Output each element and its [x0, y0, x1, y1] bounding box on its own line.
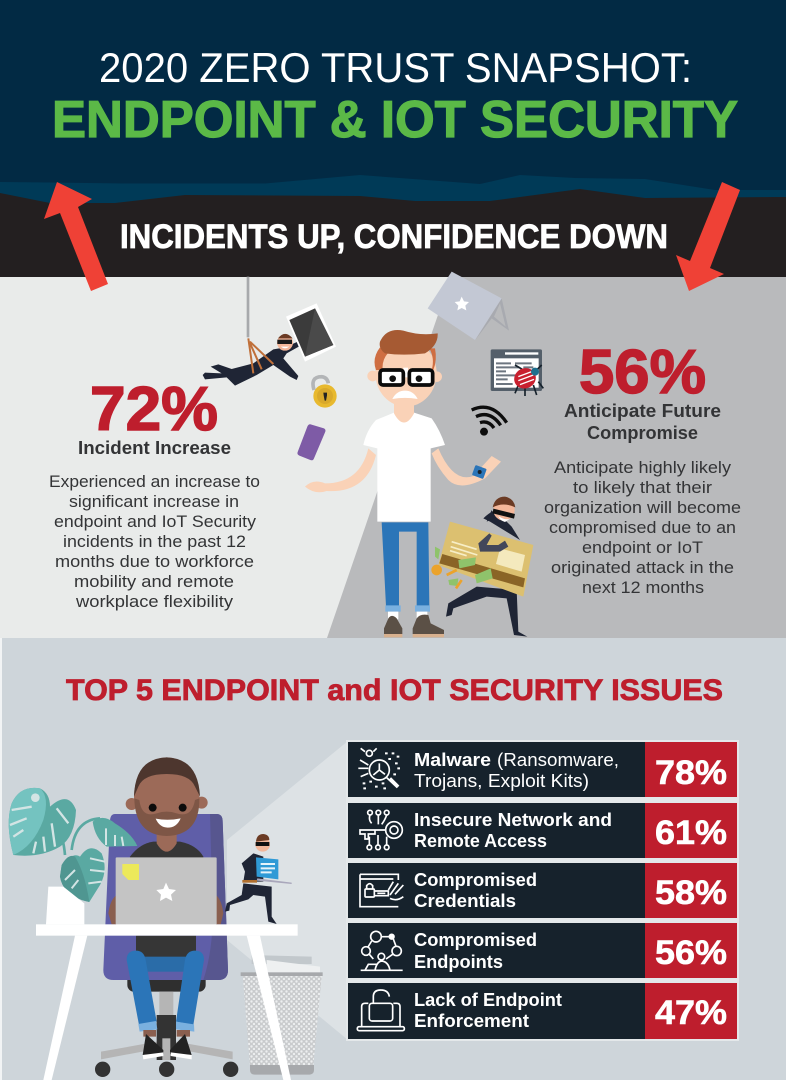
stat label: incident increase: Incident Increase	[78, 437, 231, 458]
heading: top 5 issues: TOP 5 ENDPOINT and IOT SECURITY ISSUES	[66, 674, 723, 707]
text block: compromise description: originated attack in the	[551, 558, 734, 577]
row: compromised endpoints: 56%	[655, 934, 727, 972]
panel: top 5 background	[0, 638, 786, 1080]
arrow: up	[44, 182, 108, 291]
icon: endpoint network	[361, 931, 403, 970]
panel: incident increase statistic	[49, 375, 260, 611]
row: malware	[348, 742, 737, 797]
row: lack of endpoint enforcement: 47%	[655, 994, 727, 1032]
illustration: thief on rope with tablet	[203, 277, 336, 386]
text block: compromise description: endpoint or IoT	[582, 538, 703, 557]
icon: padlock	[313, 377, 337, 408]
table: top 5 issues	[346, 740, 739, 1041]
row: lack of endpoint enforcement: Enforcement	[414, 1010, 529, 1031]
text block: incident description: months due to workforce	[55, 552, 254, 571]
icon: flying laptop	[428, 272, 509, 340]
text block: incident description: incidents in the past 12	[63, 532, 246, 551]
text block: compromise description: organization will become	[544, 498, 741, 517]
text block: incident description: significant increase in	[69, 492, 239, 511]
text block: compromise description: next 12 months	[582, 578, 704, 597]
row: compromised endpoints: Endpoints	[414, 951, 503, 972]
icon: malware magnifier	[358, 748, 400, 788]
illustration: desk	[36, 924, 298, 1080]
illustration: man at desk with laptop	[95, 757, 238, 1077]
icon: laptop with open lock	[357, 990, 404, 1031]
illustration: thief stealing credit card	[431, 497, 533, 637]
row: compromised credentials: Compromised	[414, 869, 537, 890]
stat: 72%: 72%	[90, 375, 218, 444]
text block: incident description: workplace flexibility	[75, 592, 234, 611]
text block: incident description: endpoint and IoT Security	[54, 512, 257, 531]
row: malware: 78%	[655, 754, 727, 792]
title: 2020 ZERO TRUST SNAPSHOT:	[99, 44, 692, 91]
row: insecure network	[348, 803, 737, 858]
row: compromised endpoints	[348, 923, 737, 978]
row: insecure network: 61%	[655, 814, 727, 852]
title	[52, 44, 738, 149]
row: compromised credentials: 58%	[655, 874, 727, 912]
panel: anticipate future compromise statistic	[544, 338, 741, 597]
text block: compromise description: compromised due to an	[549, 518, 736, 537]
row: malware: Trojans, Exploit Kits)	[414, 770, 589, 791]
title: ENDPOINT & IOT SECURITY	[52, 91, 738, 149]
illustration: wastebasket	[241, 955, 323, 1075]
illustration: plant in white vase	[9, 788, 137, 924]
row: insecure network: Remote Access	[414, 830, 547, 851]
text block: incident description	[49, 472, 260, 611]
header background	[0, 0, 786, 280]
icon: key with circuits	[360, 810, 402, 850]
text block: compromise description: to likely that their	[573, 478, 712, 497]
stat: 56%: 56%	[579, 338, 706, 407]
row: lack of endpoint enforcement	[348, 983, 737, 1039]
text block: incident description: mobility and remote	[74, 572, 234, 591]
arrow: down	[676, 182, 740, 291]
text block: compromise description	[544, 458, 741, 597]
illustration: thief stealing laptop on desk	[225, 834, 292, 924]
row: malware: Malware	[414, 749, 491, 770]
text block: incident description: Experienced an increase to	[49, 472, 260, 491]
stat label: anticipate future compromise: Compromise	[587, 422, 698, 443]
text block: compromise description: Anticipate highly likely	[554, 458, 732, 477]
row: insecure network: Insecure Network and	[414, 809, 612, 830]
stat label: anticipate future compromise: Anticipate Future	[564, 400, 721, 421]
row: lack of endpoint enforcement: Lack of Endpoint	[414, 989, 562, 1010]
heading: incidents up, confidence down: INCIDENTS UP, CONFIDENCE DOWN	[120, 218, 668, 256]
row: malware: (Ransomware,	[497, 749, 619, 770]
panel: incidents background	[0, 277, 786, 638]
icon: purple phone	[297, 424, 325, 460]
stat label: anticipate future compromise	[564, 400, 721, 443]
icon: browser with bug	[491, 349, 543, 396]
row: compromised credentials	[348, 863, 737, 918]
row: compromised endpoints: Compromised	[414, 929, 537, 950]
icon: credentials login	[360, 874, 403, 907]
icon: wifi	[472, 407, 507, 436]
row: compromised credentials: Credentials	[414, 890, 516, 911]
illustration: worried man	[305, 330, 501, 637]
